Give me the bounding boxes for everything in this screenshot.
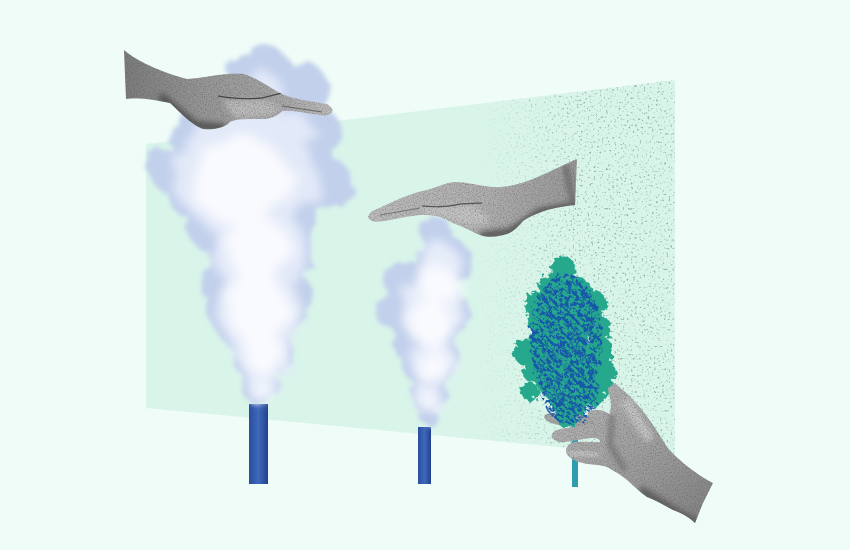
- large smoke cloud: [148, 46, 351, 404]
- tree trunk: [572, 440, 578, 487]
- hand shading and thumb: [160, 93, 322, 128]
- hand shape: [124, 50, 332, 129]
- small smoke cloud: [375, 216, 474, 424]
- hand back finger behind tree: [544, 413, 600, 430]
- hand over large cloud: [124, 50, 332, 129]
- hand over small cloud: [368, 159, 578, 237]
- hand shading and thumb: [380, 165, 578, 236]
- mint backdrop panel: [146, 80, 675, 458]
- palm and fingers: [552, 383, 713, 523]
- chimney: tall: [249, 404, 268, 484]
- canopy green foliage: [513, 256, 616, 429]
- tree canopy: [513, 256, 616, 429]
- speckled texture on panel: [484, 80, 675, 454]
- hand shape: [368, 159, 577, 237]
- hand holding tree: [552, 383, 713, 525]
- hand shading: [566, 400, 700, 525]
- canopy blue shading: [530, 274, 602, 424]
- chimney: short: [418, 427, 431, 484]
